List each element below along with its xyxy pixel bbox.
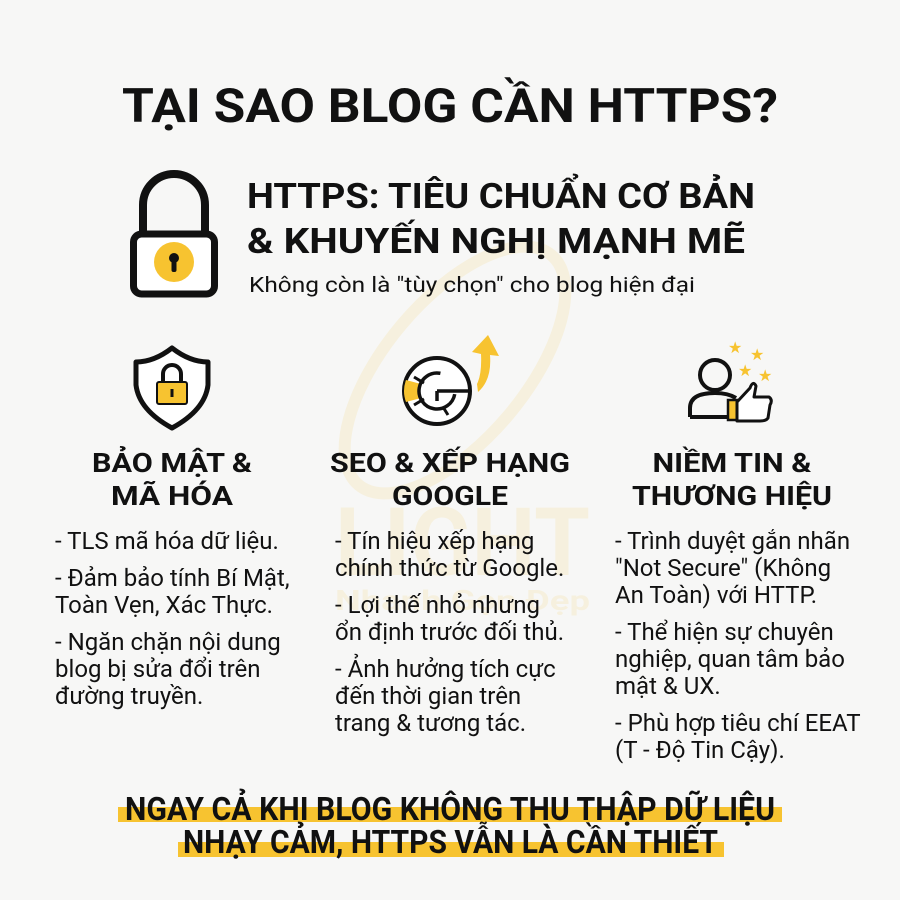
column 3: trust [615,445,861,764]
title: TẠI SAO BLOG CẦN HTTPS? [122,78,778,134]
column 2: SEO: chính thức từ Google. [335,554,564,582]
column 3: trust: NIỀM TIN & [652,445,812,479]
bottom callout [118,789,782,861]
column 2: SEO: - Lợi thế nhỏ nhưng [335,591,540,619]
column 2: SEO: đến thời gian trên [335,682,521,710]
column 2: SEO: GOOGLE [392,480,508,512]
subtitle: Không còn là "tùy chọn" cho blog hiện đại [249,274,695,298]
column 1: security: BẢO MẬT & [92,445,252,479]
column 2: SEO: - Tín hiệu xếp hạng [335,527,534,555]
column 2: SEO: trang & tương tác. [335,709,526,737]
column 3: trust: An Toàn) với HTTP. [615,581,817,609]
icon: person thumbs up stars: ★ [738,361,752,380]
column 2: SEO: SEO & XẾP HẠNG [330,445,570,479]
watermark logo: Nhanh Gọn Đẹp [335,584,590,617]
column 1: security: - TLS mã hóa dữ liệu. [55,527,279,555]
icon: person thumbs up stars [690,338,772,421]
column 3: trust: mật & UX. [615,672,721,700]
column 2: SEO: ổn định trước đối thủ. [335,618,564,646]
icon: padlock [134,174,214,294]
column 1: security: blog bị sửa đổi trên [55,655,260,683]
watermark logo: LIGHT [335,488,590,599]
column 3: trust: - Trình duyệt gắn nhãn [615,527,850,555]
icon: person thumbs up stars: ★ [728,338,742,357]
subheading: & KHUYẾN NGHỊ MẠNH MẼ [247,219,745,262]
subheading: HTTPS: TIÊU CHUẨN CƠ BẢN [247,173,755,217]
column 3: trust: - Thể hiện sự chuyên [615,618,834,646]
column 3: trust: (T - Độ Tin Cậy). [615,736,785,764]
icon: person thumbs up stars: ★ [758,366,772,385]
column 1: security: MÃ HÓA [111,479,234,512]
bottom callout: NHẠY CẢM, HTTPS VẪN LÀ CẦN THIẾT [183,822,718,861]
icon: google G with arrow [404,335,499,424]
icon: person thumbs up stars: ★ [750,345,764,364]
column 3: trust: THƯƠNG HIỆU [632,480,832,512]
column 1: security: - Đảm bảo tính Bí Mật, [55,564,290,592]
column 1: security [55,445,290,710]
column 2: SEO [330,445,570,737]
column 1: security: - Ngăn chặn nội dung [55,628,281,656]
column 3: trust: "Not Secure" (Không [615,554,831,582]
column 3: trust: nghiệp, quan tâm bảo [615,645,845,673]
icon: shield lock [136,348,208,428]
subheading [247,173,755,262]
column 1: security: Toàn Vẹn, Xác Thực. [55,591,273,619]
column 3: trust: - Phù hợp tiêu chí EEAT [615,709,861,737]
bottom callout: NGAY CẢ KHI BLOG KHÔNG THU THẬP DỮ LIỆU [125,789,775,828]
watermark logo [305,210,605,617]
column 2: SEO: - Ảnh hưởng tích cực [335,653,556,683]
column 1: security: đường truyền. [55,682,203,710]
